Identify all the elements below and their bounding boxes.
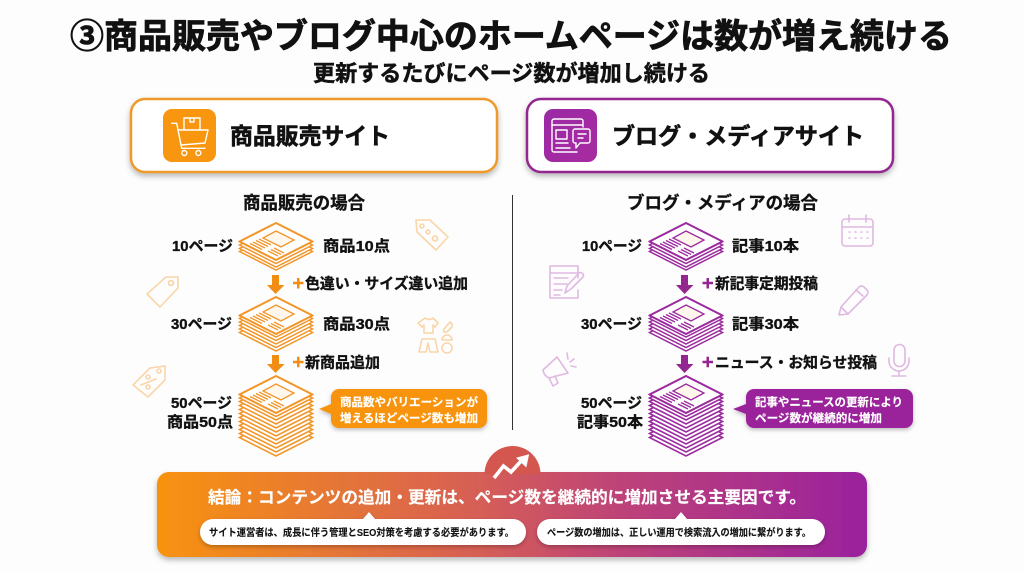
section heading: product: 商品販売の場合 bbox=[243, 193, 365, 213]
icon: blog window bbox=[544, 109, 597, 162]
label: product 10: 商品10点 bbox=[323, 237, 390, 255]
callout: product: 商品数やバリエーションが bbox=[340, 395, 478, 409]
icon: shopping cart bbox=[163, 109, 216, 162]
callout: blog bbox=[733, 389, 913, 428]
section heading: blog: ブログ・メディアの場合 bbox=[627, 193, 818, 213]
arrow: down bbox=[676, 355, 694, 373]
stack: 10 pages product bbox=[240, 223, 312, 270]
note pill: right: ページ数の増加は、正しい運用で検索流入の増加に繋がります。 bbox=[547, 526, 811, 539]
icon: notepad and pen bbox=[550, 266, 584, 298]
callout: blog: ページ数が継続的に増加 bbox=[755, 411, 882, 425]
title: ③商品販売やブログ中心のホームページは数が増え続ける bbox=[70, 17, 952, 56]
icon badge: rising arrow bbox=[484, 446, 540, 478]
panel: blog media header bbox=[527, 99, 893, 172]
label: add new products: 新商品追加 bbox=[305, 354, 380, 372]
callout: product bbox=[319, 389, 487, 428]
panel: product sales header bbox=[131, 99, 497, 172]
label: 50 pages: 50ページ bbox=[171, 395, 232, 412]
icon: pen bbox=[839, 286, 868, 315]
note pill: left bbox=[200, 512, 526, 545]
note pill: left: サイト運営者は、成長に伴う管理とSEO対策を考慮する必要があります。 bbox=[209, 526, 514, 539]
icon: microphone bbox=[889, 344, 909, 376]
icon: discount tag bbox=[133, 366, 165, 397]
arrow: down bbox=[267, 355, 284, 373]
label: 10 pages: 10ページ bbox=[172, 238, 233, 255]
label: news posts: ニュース・お知らせ投稿 bbox=[715, 354, 877, 372]
callout: product: 増えるほどページ数も増加 bbox=[340, 411, 478, 425]
icon: tag bbox=[147, 277, 178, 307]
conclusion text: 結論：コンテンツの追加・更新は、ページ数を継続的に増加させる主要因です。 bbox=[208, 487, 806, 507]
center divider bbox=[512, 195, 514, 430]
panel heading: 商品販売サイト bbox=[230, 123, 390, 149]
label: product 30: 商品30点 bbox=[323, 315, 390, 333]
subtitle: 更新するたびにページ数が増加し続ける bbox=[313, 61, 710, 86]
icon: price tag bbox=[416, 220, 448, 250]
label: 10 pages blog: 10ページ bbox=[582, 238, 642, 255]
label: add colors and sizes: 色違い・サイズ違い追加 bbox=[305, 274, 468, 292]
label: article 30: 記事30本 bbox=[732, 315, 799, 333]
label: product 50: 商品50点 bbox=[167, 413, 233, 431]
arrow: down bbox=[676, 275, 694, 294]
stack: 50 pages product bbox=[240, 376, 312, 456]
arrow: down bbox=[267, 275, 284, 294]
stack: 30 pages product bbox=[240, 297, 312, 351]
stack: 30 pages blog bbox=[650, 297, 722, 351]
panel heading: ブログ・メディアサイト bbox=[612, 123, 864, 149]
stack: 10 pages blog bbox=[650, 223, 722, 270]
icon: clothes bbox=[418, 318, 452, 353]
callout: blog: 記事やニュースの更新により bbox=[755, 395, 903, 409]
label: article 50: 記事50本 bbox=[577, 413, 643, 431]
icon: calendar bbox=[842, 215, 873, 246]
label: 30 pages: 30ページ bbox=[171, 316, 232, 333]
label: 50 pages blog: 50ページ bbox=[581, 395, 642, 412]
icon: megaphone bbox=[543, 353, 576, 386]
panel: conclusion bbox=[157, 446, 867, 557]
label: article 10: 記事10本 bbox=[732, 237, 799, 255]
label: new posts: 新記事定期投稿 bbox=[715, 274, 818, 292]
label: 30 pages blog: 30ページ bbox=[581, 316, 642, 333]
note pill: right bbox=[537, 512, 825, 545]
stack: 50 pages blog bbox=[650, 376, 722, 456]
